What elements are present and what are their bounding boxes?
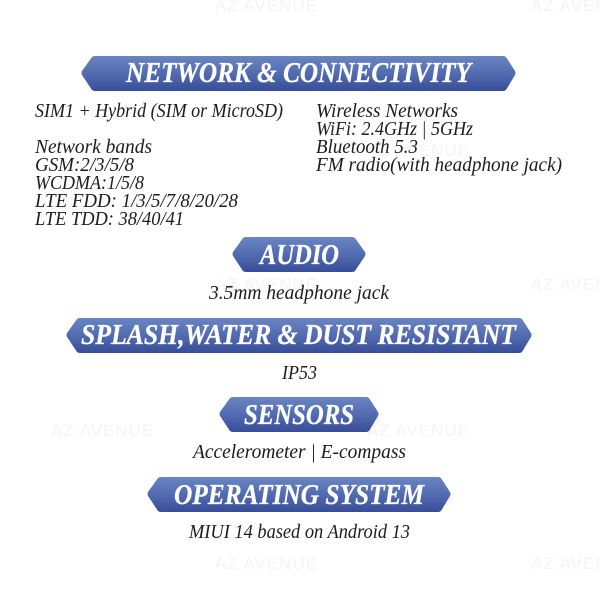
text block: SIM and network bands: Network bands (34, 136, 152, 158)
text block: SIM and network bands: SIM1 + Hybrid (SIM or MicroSD) (35, 100, 283, 122)
text: headphone jack: 3.5mm headphone jack (208, 282, 390, 304)
text block: wireless networks: FM radio(with headphone jack) (315, 154, 562, 176)
watermarks: AZ AVENUE (367, 141, 470, 160)
heading: splash, water and dust resistant: SPLASH,WATER & DUST RESISTANT (81, 320, 518, 351)
text block: wireless networks: WiFi: 2.4GHz | 5GHz (316, 118, 473, 140)
heading: audio (232, 237, 366, 272)
watermarks: AZ AVENUE (51, 421, 154, 440)
text block: SIM and network bands: WCDMA:1/5/8 (35, 172, 144, 194)
text block: wireless networks (315, 100, 562, 176)
heading: network and connectivity: NETWORK & CONNECTIVITY (125, 58, 474, 89)
text block: wireless networks: Bluetooth 5.3 (316, 136, 418, 158)
text block: SIM and network bands: LTE FDD: 1/3/5/7/8/20/28 (34, 190, 238, 212)
heading: sensors (220, 397, 378, 432)
watermarks: AZ AVENUE (215, 275, 318, 294)
text block: SIM and network bands: LTE TDD: 38/40/41 (34, 208, 184, 230)
text: IP rating: IP53 (281, 362, 317, 384)
heading: operating system: OPERATING SYSTEM (174, 480, 425, 511)
heading: sensors: SENSORS (244, 400, 354, 431)
text: operating system version: MIUI 14 based on Android 13 (188, 521, 410, 543)
text block: SIM and network bands (34, 100, 283, 230)
watermarks: AZ AVENUE (215, 554, 318, 573)
heading: audio: AUDIO (258, 240, 339, 271)
text: sensors list: Accelerometer | E-compass (191, 441, 406, 463)
text block: wireless networks: Wireless Networks (316, 100, 458, 122)
text block: SIM and network bands: GSM:2/3/5/8 (35, 154, 134, 176)
watermarks: AZ AVENUE (367, 421, 470, 440)
